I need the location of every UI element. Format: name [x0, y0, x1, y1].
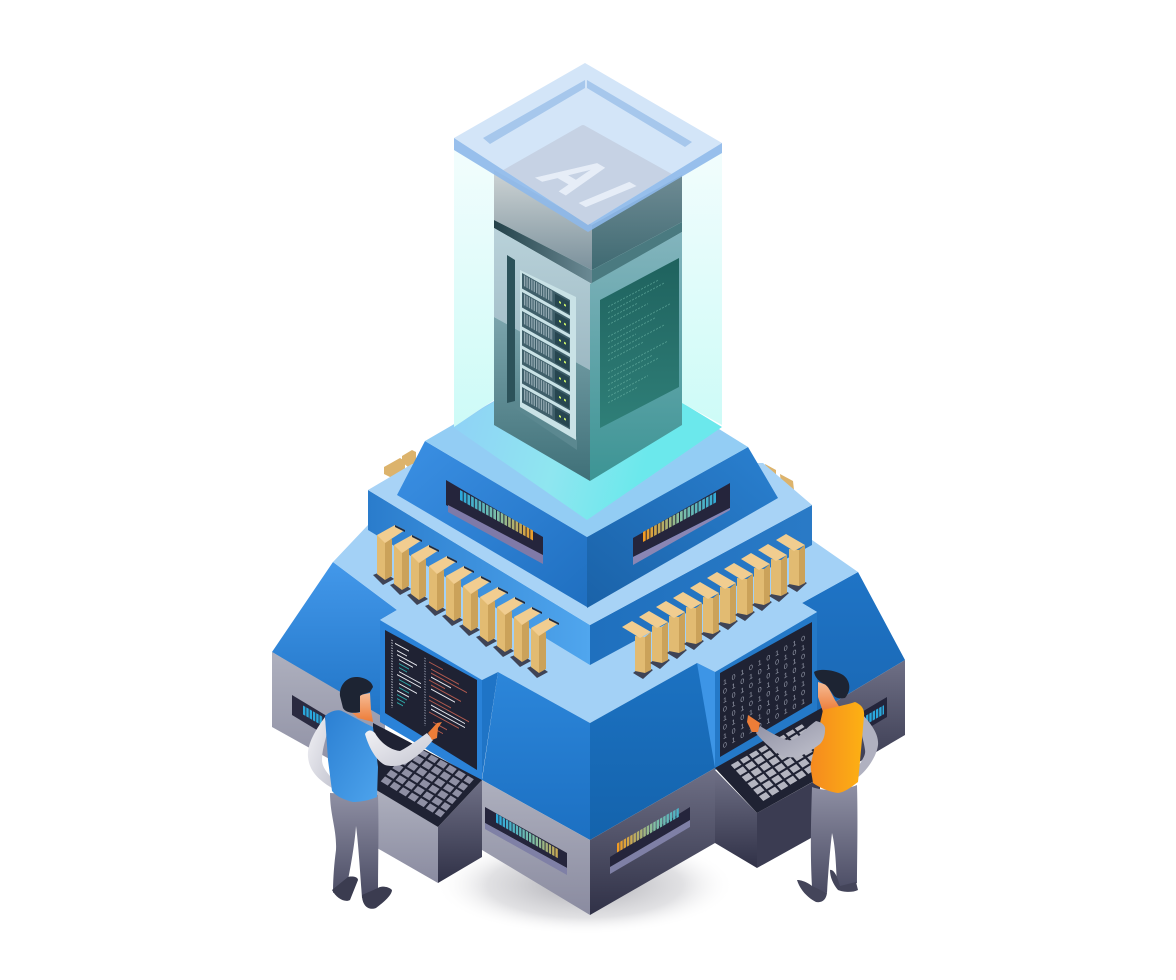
- top platform: [397, 345, 778, 608]
- neck and face: [818, 682, 840, 712]
- base: light blue top surface: [333, 525, 858, 723]
- right keyboard: [715, 708, 823, 813]
- second tier right side: [590, 505, 812, 665]
- cap left face: [494, 170, 592, 270]
- left console box left face: [377, 790, 438, 883]
- trousers: [811, 785, 857, 893]
- hair: [814, 670, 849, 698]
- small back connectors: [384, 450, 794, 490]
- illustration: AI server tower on a computing base with two operators: [272, 63, 905, 926]
- centre left grey face: [482, 780, 590, 915]
- connector row left: [373, 525, 559, 678]
- inner rim right: [587, 80, 692, 147]
- connector row right: [622, 534, 807, 679]
- vest: [325, 710, 378, 802]
- body left lower: [494, 317, 590, 481]
- status slot right: [610, 807, 690, 874]
- trousers: [330, 793, 378, 898]
- cyan floor: [453, 345, 722, 520]
- central column: [482, 663, 715, 915]
- left keyboard: [373, 723, 483, 827]
- ground shadow: [435, 835, 735, 935]
- platform right face: [587, 447, 778, 608]
- left wing: [272, 562, 397, 720]
- hand: [428, 722, 442, 740]
- hair: [340, 677, 373, 713]
- second tier rim: [368, 463, 812, 625]
- right monitor with binary: 0101010101: [723, 694, 810, 750]
- right wing lower face with slot: [815, 660, 905, 788]
- front arm: [756, 721, 825, 757]
- rack panel: [520, 270, 576, 440]
- shoes: [332, 876, 392, 909]
- platform rim: [425, 347, 748, 537]
- wedge right: [697, 663, 715, 768]
- centre right dark face: [590, 768, 715, 915]
- person left in blue vest: [308, 677, 442, 909]
- second tier left side: [368, 490, 590, 665]
- base: outer wings: [272, 562, 905, 790]
- back arm: [308, 717, 332, 788]
- code panel: [600, 258, 679, 428]
- gap left: [494, 220, 592, 284]
- left console: [373, 620, 483, 883]
- vest: [811, 702, 864, 793]
- status slot right: [633, 483, 730, 565]
- person right in orange vest: [747, 670, 878, 902]
- right monitor with binary: 0101010101: [723, 640, 810, 696]
- right wing: [802, 572, 905, 714]
- second tier: [368, 463, 812, 665]
- back arm: [857, 715, 878, 778]
- right console blue frame: [715, 612, 817, 770]
- server units: [522, 273, 570, 430]
- centre right blue face: [590, 663, 715, 840]
- centre left blue face: [482, 672, 590, 840]
- cap right face: [592, 175, 682, 270]
- left wing lower face with slot: [272, 652, 385, 790]
- right monitor with binary: 1010101010: [723, 631, 810, 687]
- status slot left: [485, 807, 567, 875]
- hand: [747, 715, 760, 732]
- rack recess: [507, 255, 577, 450]
- top of server seen through the lid: [504, 125, 672, 224]
- front arm: [365, 730, 433, 766]
- right monitor with binary: 1010101010: [723, 667, 810, 723]
- right console box left face: [715, 770, 757, 868]
- body right face: [590, 232, 682, 481]
- right monitor with binary: 0101010101: [723, 676, 810, 732]
- AI label: AI: [520, 150, 664, 220]
- right monitor with binary: [720, 622, 812, 757]
- AI server: [494, 170, 682, 481]
- right console box right face: [757, 778, 820, 868]
- inner rim left: [483, 80, 585, 144]
- left console box right face: [438, 780, 482, 883]
- right monitor with binary: 1010101010: [723, 685, 810, 741]
- glass column: [454, 150, 722, 427]
- platform left face: [397, 441, 587, 607]
- lid top: [454, 63, 722, 225]
- right monitor with binary: 0101010101: [723, 658, 810, 714]
- left monitor with code: [385, 630, 477, 770]
- shoes: [797, 870, 858, 902]
- wedge left: [482, 672, 498, 778]
- right monitor with binary: 1010101010: [723, 649, 810, 705]
- right console: [715, 612, 833, 868]
- status slot left: [446, 480, 543, 564]
- glass lid: [454, 63, 722, 240]
- neck and face: [352, 693, 373, 722]
- gap right: [592, 222, 682, 284]
- lid edge: [454, 138, 722, 232]
- left console blue frame: [380, 620, 482, 782]
- body left upper: [494, 228, 592, 370]
